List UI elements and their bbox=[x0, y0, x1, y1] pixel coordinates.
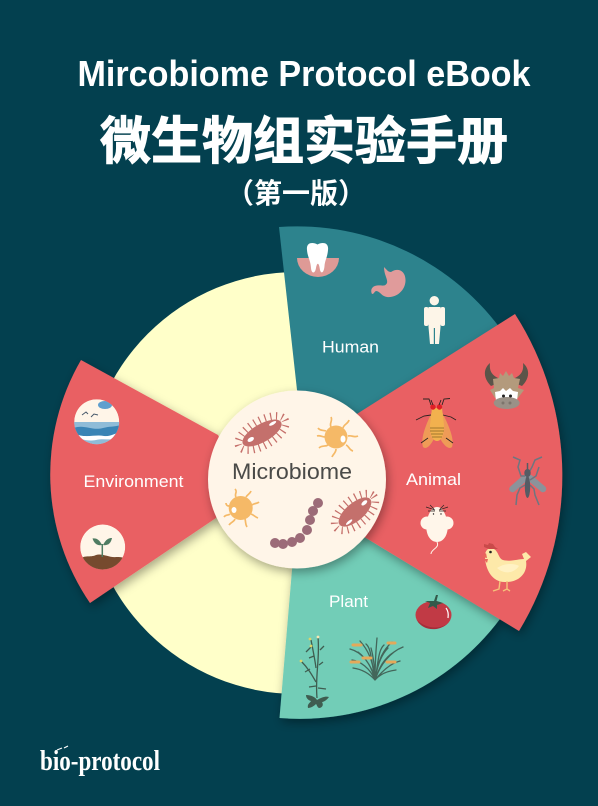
label: Human: Human bbox=[322, 338, 379, 356]
icon: mouse bbox=[420, 505, 454, 554]
icon: seedling in soil bbox=[80, 524, 126, 570]
panel: animal sector bbox=[330, 314, 562, 631]
icon: grass bbox=[350, 638, 403, 680]
panel: environment sector bbox=[50, 360, 240, 603]
title: Chinese: 微生物组实验手册 bbox=[100, 113, 508, 170]
icon: chicken bbox=[482, 543, 531, 591]
subtitle: first edition: （第一版） bbox=[226, 178, 366, 209]
label: Microbiome: Microbiome bbox=[232, 459, 352, 484]
icon: person bbox=[424, 296, 445, 344]
title: English: Mircobiome Protocol eBook bbox=[78, 53, 531, 94]
icon: orange microbe lower bbox=[224, 489, 259, 527]
panel: human sector bbox=[279, 226, 505, 440]
icon: tooth bbox=[297, 243, 339, 277]
panel: central microbiome circle bbox=[208, 390, 386, 568]
label: Plant: Plant bbox=[329, 592, 368, 611]
icon: chain bacterium bbox=[270, 498, 323, 549]
label: Environment: Environment bbox=[84, 472, 184, 491]
icon: tomato bbox=[416, 595, 452, 629]
icon: sea and birds bbox=[74, 399, 120, 446]
panel: plant sector bbox=[280, 500, 500, 719]
icon: mosquito bbox=[512, 457, 543, 505]
icon: stomach bbox=[371, 267, 406, 297]
icon: rod bacterium upper bbox=[233, 409, 291, 457]
icon: orange microbe upper bbox=[317, 417, 358, 457]
icon: yak bbox=[485, 363, 528, 409]
icon: weed bbox=[300, 636, 329, 708]
panel: yellow base disc bbox=[86, 272, 508, 694]
icon: rod bacterium lower bbox=[328, 487, 382, 537]
logo: bio-protocol: bio-protocol bbox=[40, 745, 160, 777]
label: Animal: Animal bbox=[406, 470, 461, 489]
icon: moth bbox=[416, 398, 456, 448]
